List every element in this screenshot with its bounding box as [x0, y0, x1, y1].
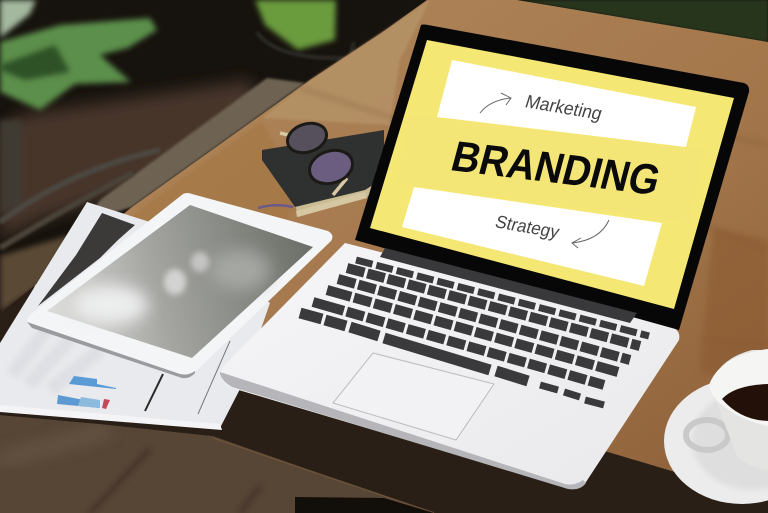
label: Strategy: Strategy [493, 212, 562, 242]
table front dark [0, 285, 768, 513]
notebook [258, 130, 384, 217]
newspaper image [38, 213, 135, 306]
label: Marketing: Marketing [523, 91, 605, 124]
yellow band [397, 115, 704, 223]
saucer [664, 378, 768, 504]
deck floor [0, 415, 434, 513]
laptop [220, 24, 749, 489]
beam [85, 78, 305, 222]
hoses [0, 150, 160, 222]
plant in pot [255, 0, 336, 50]
white band: strategy [402, 187, 662, 286]
newspaper documents [0, 202, 270, 430]
laptop base [220, 243, 679, 489]
tablet screen [47, 205, 313, 358]
chart on document [57, 376, 116, 409]
leaf [0, 18, 157, 110]
coffee [722, 384, 768, 421]
arrow: marketing [480, 93, 511, 113]
tablet [27, 193, 332, 378]
table leg [295, 497, 434, 513]
arrow: strategy [572, 220, 609, 248]
heading: BRANDING: BRANDING [446, 133, 665, 205]
screen bezel [355, 24, 749, 330]
wood dark plank right [700, 227, 768, 400]
cup body [710, 350, 768, 470]
rule lines [145, 374, 163, 411]
text lines [12, 325, 100, 390]
glasses [280, 119, 357, 195]
coffee cup [664, 349, 768, 504]
hinge [380, 248, 637, 323]
cup rim [709, 349, 768, 426]
white band: marketing [437, 60, 696, 147]
cup handle [686, 420, 728, 450]
keyboard [300, 260, 649, 405]
screen [370, 40, 734, 309]
trackpad [333, 353, 494, 440]
